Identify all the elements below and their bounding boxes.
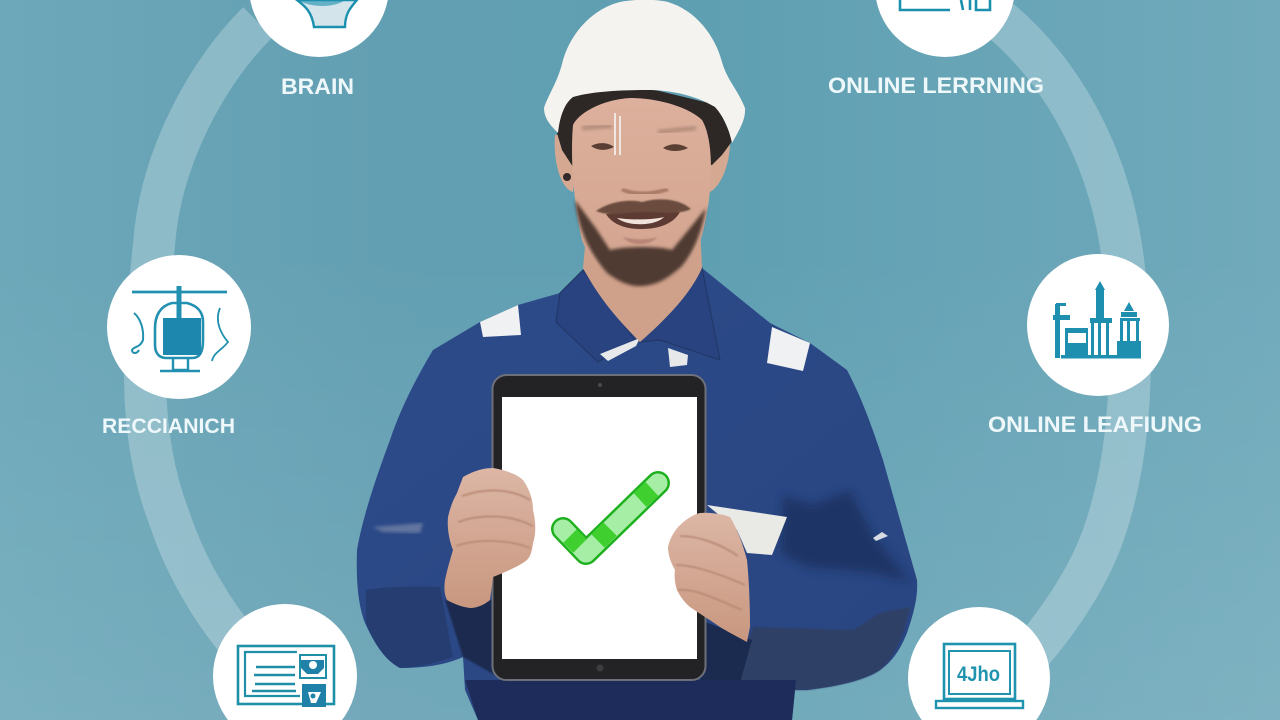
pocket patch bbox=[707, 505, 787, 555]
checkmark bbox=[563, 483, 658, 553]
lower torso bbox=[465, 680, 796, 720]
icon: online learning bbox=[875, 0, 1015, 57]
label: online learning: ONLINE LERRNING bbox=[828, 73, 1044, 98]
icon: industrial plant bbox=[1027, 254, 1169, 396]
teeth bbox=[617, 217, 664, 224]
earring bbox=[563, 173, 571, 181]
label: research: RECCIANICH bbox=[102, 415, 235, 438]
highlight on brow bbox=[615, 113, 620, 155]
beard bbox=[575, 200, 706, 286]
lower lip bbox=[623, 237, 657, 244]
eyebrows bbox=[582, 126, 696, 132]
right sleeve fold bbox=[780, 490, 910, 582]
icon: helicopter research bbox=[107, 255, 251, 399]
coverall body bbox=[357, 268, 917, 720]
ears bbox=[555, 135, 730, 193]
right shadow under hand bbox=[700, 620, 752, 690]
right cuff bbox=[738, 607, 910, 690]
shoulder patch left bbox=[480, 305, 521, 337]
finger lines bbox=[456, 490, 533, 548]
shoulder patch right bbox=[767, 327, 810, 371]
label: brain: BRAIN bbox=[281, 74, 354, 99]
hair bbox=[557, 88, 733, 170]
icon: laptop: 4Jho bbox=[957, 663, 1000, 686]
right hand bbox=[668, 513, 750, 642]
icon: brain bbox=[249, 0, 389, 57]
left collar bbox=[556, 270, 635, 362]
tablet bbox=[492, 375, 706, 680]
icon: certificate bbox=[213, 604, 357, 720]
moustache bbox=[596, 199, 691, 214]
sleeve detail bbox=[873, 532, 888, 541]
left sleeve crease bbox=[373, 523, 423, 533]
worker bbox=[357, 0, 917, 720]
neck bbox=[583, 225, 702, 342]
left hand bbox=[444, 468, 535, 608]
camera bbox=[598, 383, 602, 387]
icon: laptop bbox=[908, 607, 1050, 720]
home button bbox=[596, 664, 604, 672]
left shadow under hand bbox=[445, 600, 495, 675]
eyes bbox=[591, 143, 688, 151]
mouth bbox=[606, 211, 680, 229]
collar whites bbox=[600, 338, 688, 367]
ring connecting the icons bbox=[145, 20, 1130, 660]
nose shadow bbox=[622, 189, 668, 194]
left lower sleeve bbox=[366, 586, 453, 668]
face bbox=[572, 98, 711, 285]
label: online learning variant: ONLINE LEAFIUNG bbox=[988, 412, 1202, 437]
hard hat bbox=[544, 0, 745, 143]
right collar bbox=[640, 268, 720, 360]
tablet screen bbox=[502, 397, 697, 659]
finger lines bbox=[676, 536, 745, 610]
